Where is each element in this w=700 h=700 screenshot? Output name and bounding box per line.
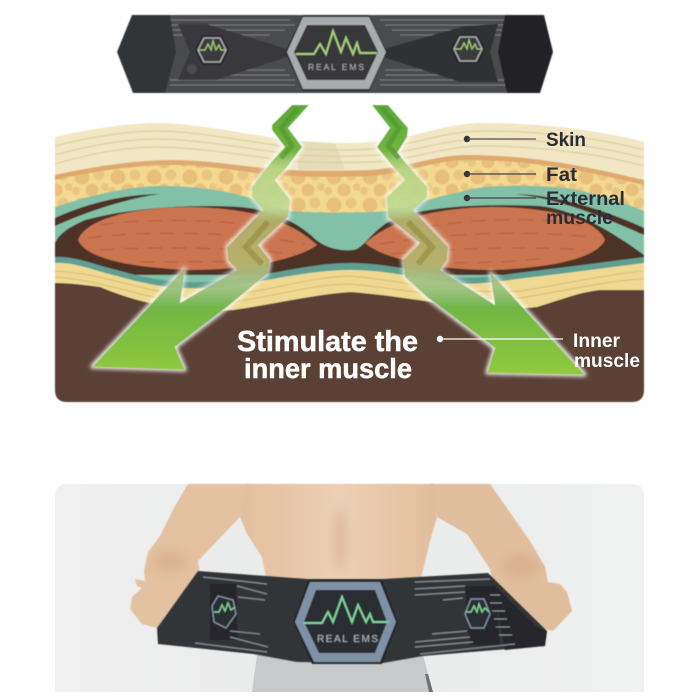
worn belt right small hexagon <box>465 599 490 628</box>
label: skin <box>464 130 586 151</box>
label: external muscle <box>464 189 625 229</box>
layer: external muscle <box>55 186 644 395</box>
center hexagon logo: REAL EMS <box>308 62 364 72</box>
label: fat: Fat <box>546 165 578 186</box>
body: muscle shading <box>152 508 538 578</box>
label: inner muscle: muscle <box>574 351 640 372</box>
worn belt center hexagon logo: REAL EMS <box>317 634 378 645</box>
label: inner muscle: Inner <box>573 331 621 352</box>
worn belt <box>157 571 547 664</box>
layer: inner muscle <box>55 283 644 402</box>
belt left end cap <box>117 15 176 93</box>
body: left arm <box>130 484 250 628</box>
label: fat <box>464 165 578 186</box>
layer: fat <box>55 160 644 395</box>
belt dark cross panels <box>178 24 290 80</box>
skin shaded patch <box>298 141 345 170</box>
worn belt center hexagon logo <box>293 580 398 664</box>
bolt inner shading <box>281 108 399 158</box>
layer: lower fascia <box>55 257 644 395</box>
right small hexagon <box>451 34 485 64</box>
layer: dark tissue <box>55 205 644 275</box>
label: external muscle: External <box>546 189 625 210</box>
shorts <box>252 655 433 692</box>
arrow: right stimulation bolt <box>372 105 585 375</box>
belt button <box>187 64 197 74</box>
layer: skin-fat boundary <box>55 155 644 395</box>
layer: lower fat <box>55 263 644 395</box>
heading: stimulate the inner muscle: inner muscle <box>244 353 412 384</box>
label: external muscle: muscle <box>546 208 613 229</box>
belt right end cap <box>498 15 553 93</box>
layer: skin <box>55 123 644 395</box>
center hexagon logo <box>285 15 387 91</box>
panel: skin cross-section diagram <box>55 105 644 402</box>
label: skin: Skin <box>546 130 586 151</box>
worn belt right end <box>493 584 547 650</box>
panel: model wearing the belt <box>55 484 644 692</box>
body: right arm <box>430 484 572 631</box>
photo background <box>55 484 644 692</box>
label: inner muscle <box>437 331 640 372</box>
arrow: left stimulation bolt <box>92 105 309 370</box>
belt strap body <box>165 15 510 93</box>
worn belt elastic pads <box>210 584 238 640</box>
left deep muscle <box>78 207 317 270</box>
body: torso <box>240 484 437 582</box>
worn belt left small hexagon <box>212 596 236 628</box>
shorts hem <box>425 674 433 692</box>
product: flat EMS belt <box>117 15 553 93</box>
heading: stimulate the inner muscle <box>237 326 418 384</box>
left small hexagon <box>195 35 229 65</box>
right deep muscle <box>365 207 605 270</box>
teal sliver separators <box>55 194 160 226</box>
heading: stimulate the inner muscle: Stimulate the <box>237 326 418 358</box>
